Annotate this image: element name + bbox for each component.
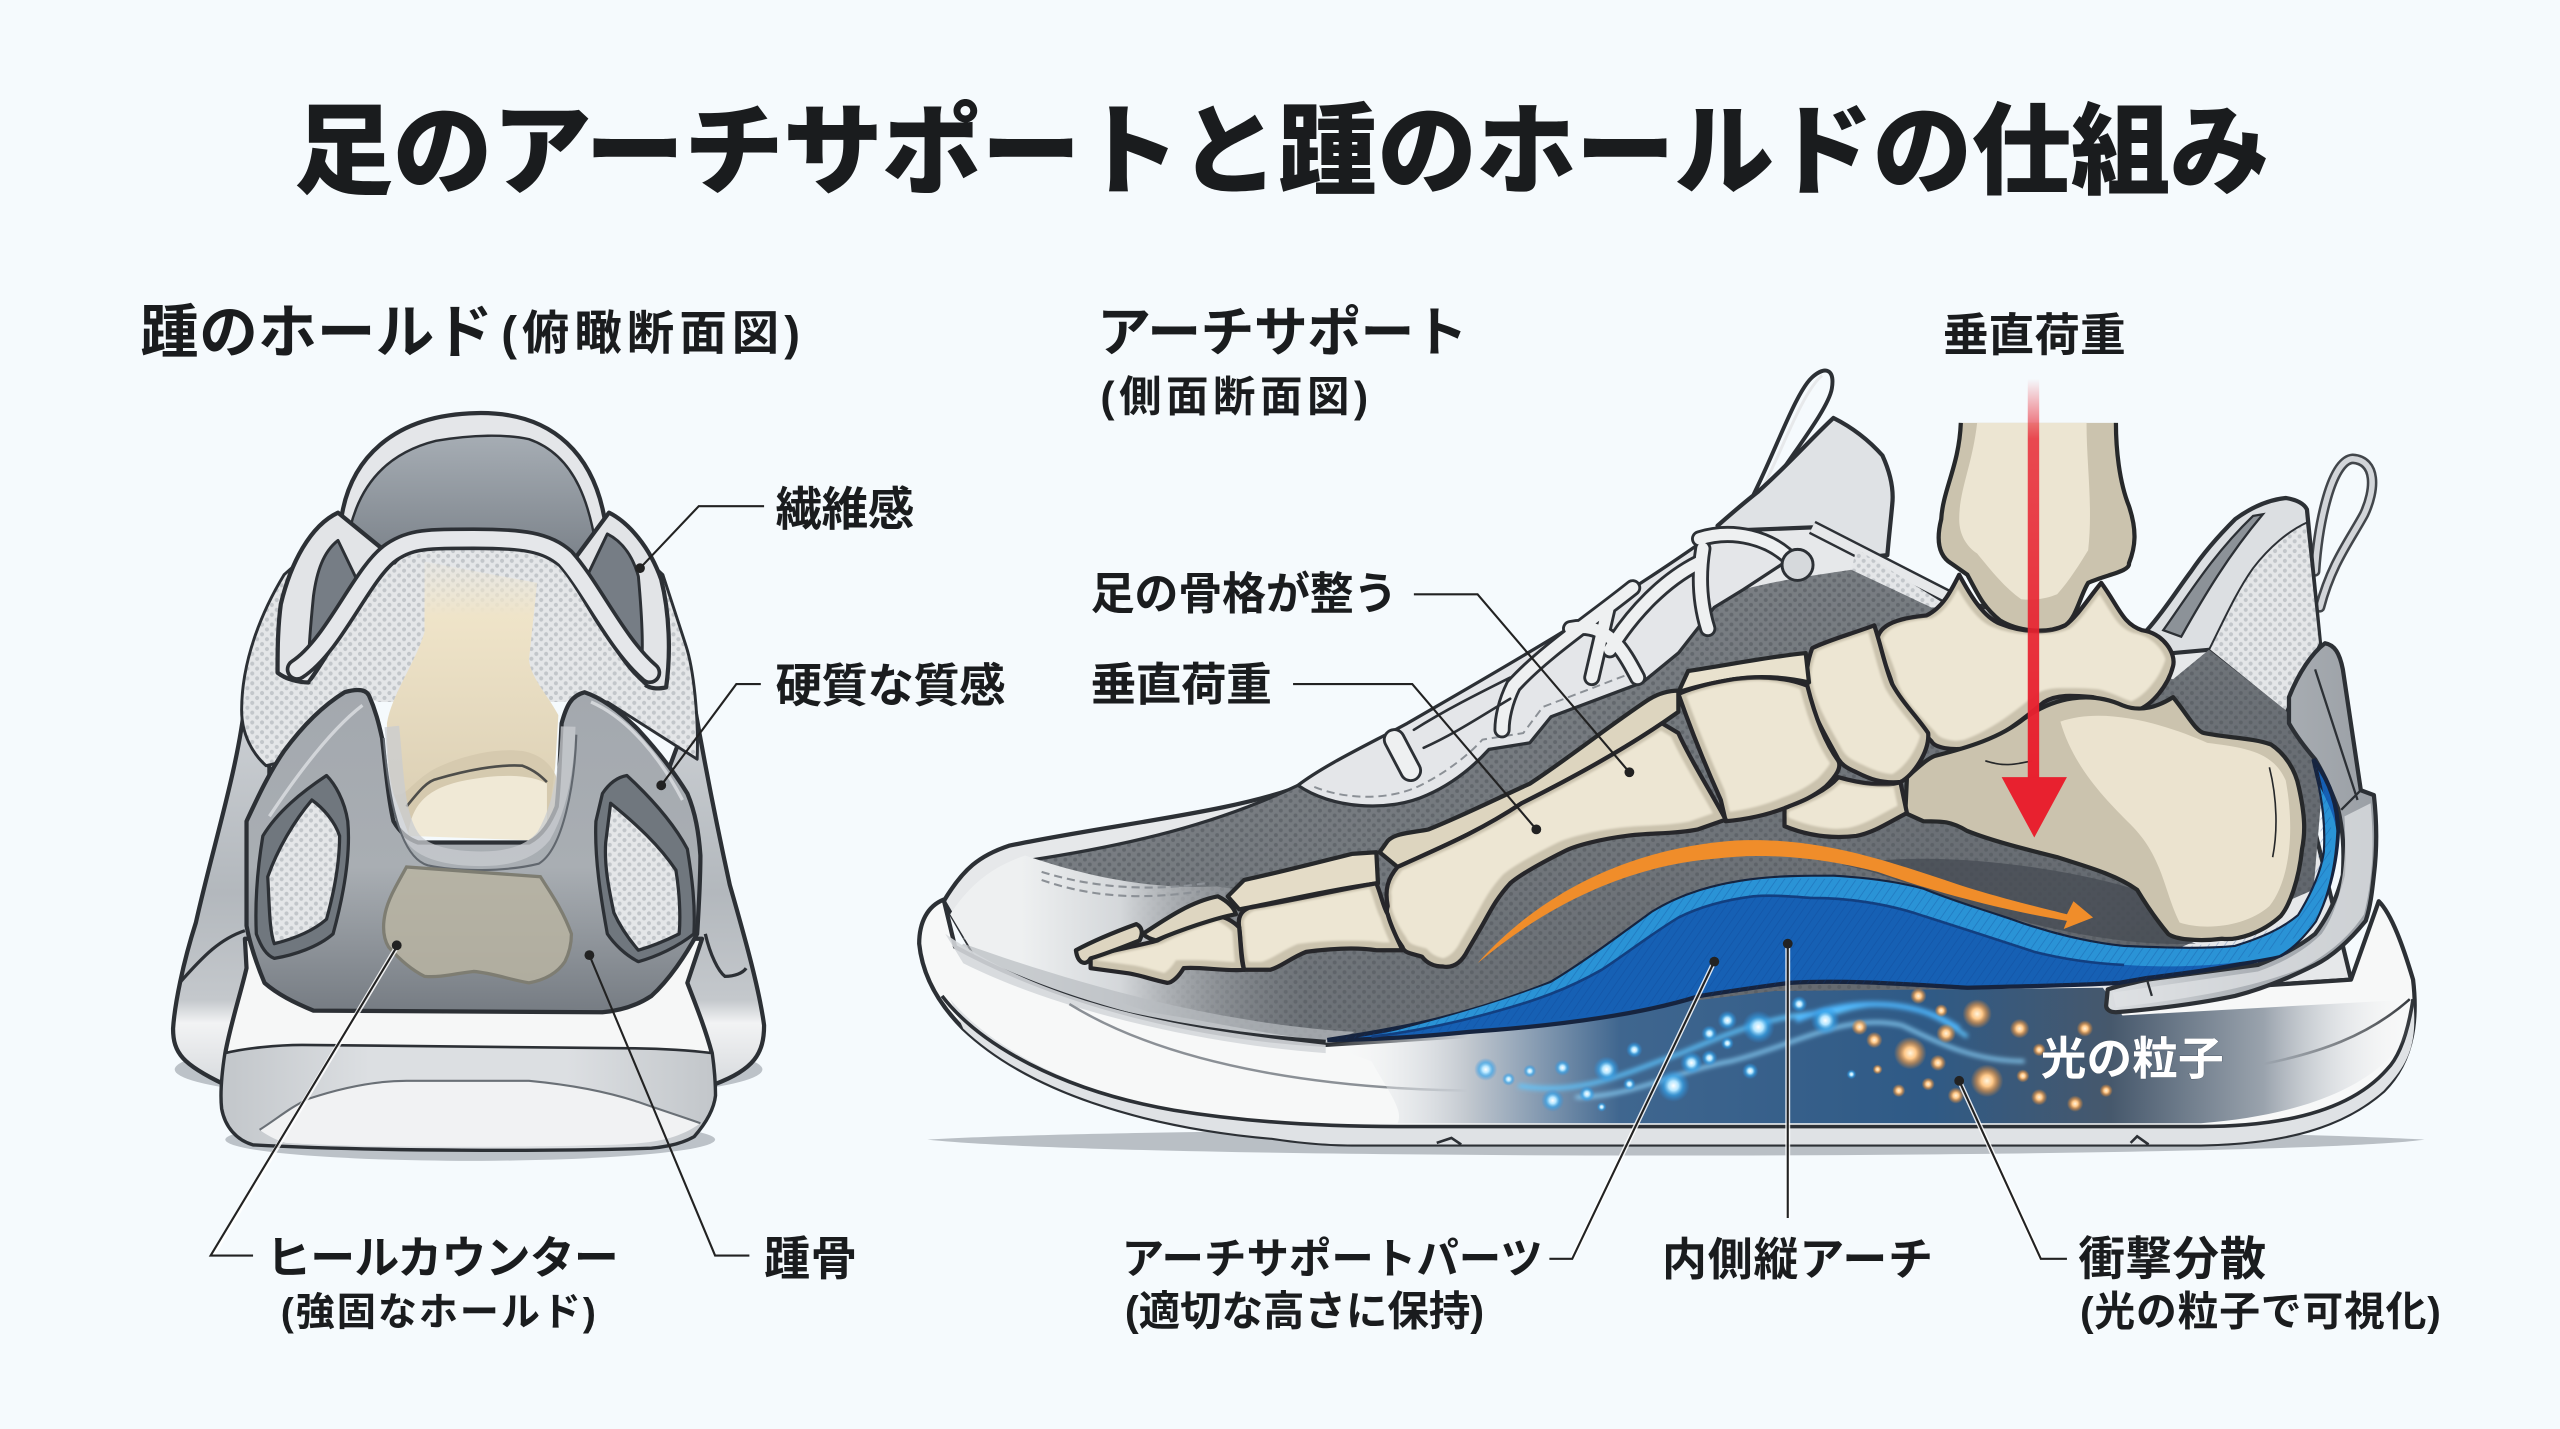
label: vertical load: 垂直荷重 — [1091, 659, 1272, 710]
collar back — [335, 413, 620, 588]
upper toe — [1143, 896, 1236, 940]
side collar dark wells — [309, 534, 642, 666]
laces — [1394, 535, 1796, 771]
right window — [596, 776, 694, 962]
ground shadow — [175, 1037, 762, 1161]
side collar pads — [278, 513, 669, 688]
illustration: side view of shoe with foot bones — [919, 371, 2424, 1156]
label: skeleton aligned: 足の骨格が整う — [1091, 570, 1398, 619]
upper base — [944, 527, 2351, 1045]
leader: heel counter — [211, 940, 402, 1256]
illustration: rear view of heel — [173, 413, 764, 1161]
light particles — [1474, 988, 2113, 1112]
orange force arrow — [1478, 840, 2093, 963]
cuboid — [1784, 777, 1907, 837]
heel pull loop — [2315, 459, 2372, 607]
label: arch support part: アーチサポートパーツ — [1122, 1235, 1543, 1282]
tibia — [1939, 423, 2135, 631]
pull loop: tongue — [1753, 371, 1832, 495]
dark interior — [963, 570, 2323, 1040]
middle toe — [1091, 916, 1244, 983]
outsole band — [950, 999, 2414, 1144]
tibia (translucent) — [387, 562, 558, 833]
counter light band — [2113, 803, 2373, 1007]
metatarsal main — [1387, 723, 1726, 967]
label: light particles: 光の粒子 — [2041, 1033, 2224, 1084]
counter highlight rim — [392, 727, 568, 859]
eyelet — [1782, 549, 1813, 580]
toe cap stitching — [1042, 872, 1205, 896]
leader: skeleton aligned — [1414, 594, 1634, 777]
heading: heel hold — [140, 301, 800, 366]
leader: shock dispersion — [1954, 1076, 2067, 1259]
collar inner dark — [346, 436, 601, 596]
dark arch shadow — [1845, 859, 2196, 944]
leader: hard texture — [656, 684, 761, 790]
heading: heel hold: (俯瞰断面図) — [501, 307, 800, 360]
sole bottom recess — [260, 1081, 700, 1147]
insole texture — [1327, 759, 2331, 1040]
heading: arch support: アーチサポート — [1097, 303, 1468, 363]
midsole lower block — [221, 1045, 715, 1150]
cuneiform — [1678, 678, 1839, 821]
tongue — [1718, 418, 1893, 563]
leader: medial arch — [1783, 939, 1793, 1218]
leader: calcaneus — [584, 950, 749, 1256]
heading: heel hold: 踵のホールド — [140, 301, 493, 366]
label: heel counter: (強固なホールド) — [281, 1292, 596, 1335]
ground shadow — [927, 1129, 2424, 1156]
title: 足のアーチサポートと踵のホールドの仕組み — [294, 97, 2269, 208]
orange particles — [1851, 988, 2113, 1112]
label: vertical load top: 垂直荷重 — [1943, 310, 2126, 361]
particle flow waves — [1518, 1004, 2024, 1097]
outer side flares of upper and sole — [173, 702, 764, 1084]
toe cap — [950, 856, 1306, 1045]
label: arch support part — [1122, 1235, 1543, 1335]
mesh panel — [242, 522, 697, 766]
front collar rim — [297, 539, 650, 673]
insole bright band — [1371, 787, 2336, 1037]
eye stay — [1298, 531, 1796, 806]
top band by ankle — [1812, 527, 1946, 596]
heading: arch support — [1097, 303, 1468, 420]
talus — [1877, 575, 2174, 749]
label: shock dispersion — [2078, 1233, 2441, 1335]
toe tip — [1076, 924, 1142, 963]
mesh inside collar — [310, 550, 645, 702]
label: medial arch: 内側縦アーチ — [1662, 1234, 1933, 1285]
heel counter — [247, 690, 700, 1012]
proximal phalanx — [1239, 883, 1402, 970]
label: heel counter — [266, 1232, 619, 1335]
left window — [256, 776, 348, 958]
label: heel counter: ヒールカウンター — [266, 1232, 619, 1283]
label: shock dispersion: (光の粒子で可視化) — [2080, 1289, 2441, 1335]
label: calcaneus: 踵骨 — [764, 1233, 857, 1285]
midsole — [221, 939, 715, 1150]
heel collar tab — [2147, 498, 2320, 712]
navicular — [1807, 625, 1928, 782]
leader: fiber texture — [635, 506, 764, 573]
blue arch support insole — [1327, 759, 2338, 1040]
label: arch support part: (適切な高さに保持) — [1125, 1288, 1484, 1335]
label: shock dispersion: 衝撃分散 — [2078, 1233, 2266, 1285]
leader: arch support part — [1549, 957, 1719, 1259]
red load arrow — [2002, 379, 2067, 838]
toe mesh strip — [947, 944, 1355, 1045]
cuneiform top — [1678, 653, 1809, 692]
leader: vertical load — [1293, 684, 1541, 834]
midsole energy window — [1326, 988, 2416, 1123]
upper phalanx strip — [1228, 852, 1378, 909]
midsole — [919, 900, 2415, 1144]
sole grooves — [1437, 999, 2410, 1144]
lobe dividing lines — [180, 931, 746, 983]
blue particles — [1474, 996, 1856, 1112]
heel mesh wedge — [2209, 522, 2320, 712]
sole inner line — [942, 996, 2413, 1127]
metatarsal upper bar — [1380, 691, 1678, 867]
calcaneus — [1905, 697, 2304, 940]
label: fiber texture: 繊維感 — [776, 484, 914, 536]
calcaneus highlight — [2060, 716, 2290, 927]
label: hard texture: 硬質な質感 — [776, 660, 1006, 712]
heading: arch support: (側面断面図) — [1100, 373, 1368, 420]
heel counter outer — [2106, 643, 2376, 1012]
calcaneus (translucent) — [384, 867, 571, 983]
